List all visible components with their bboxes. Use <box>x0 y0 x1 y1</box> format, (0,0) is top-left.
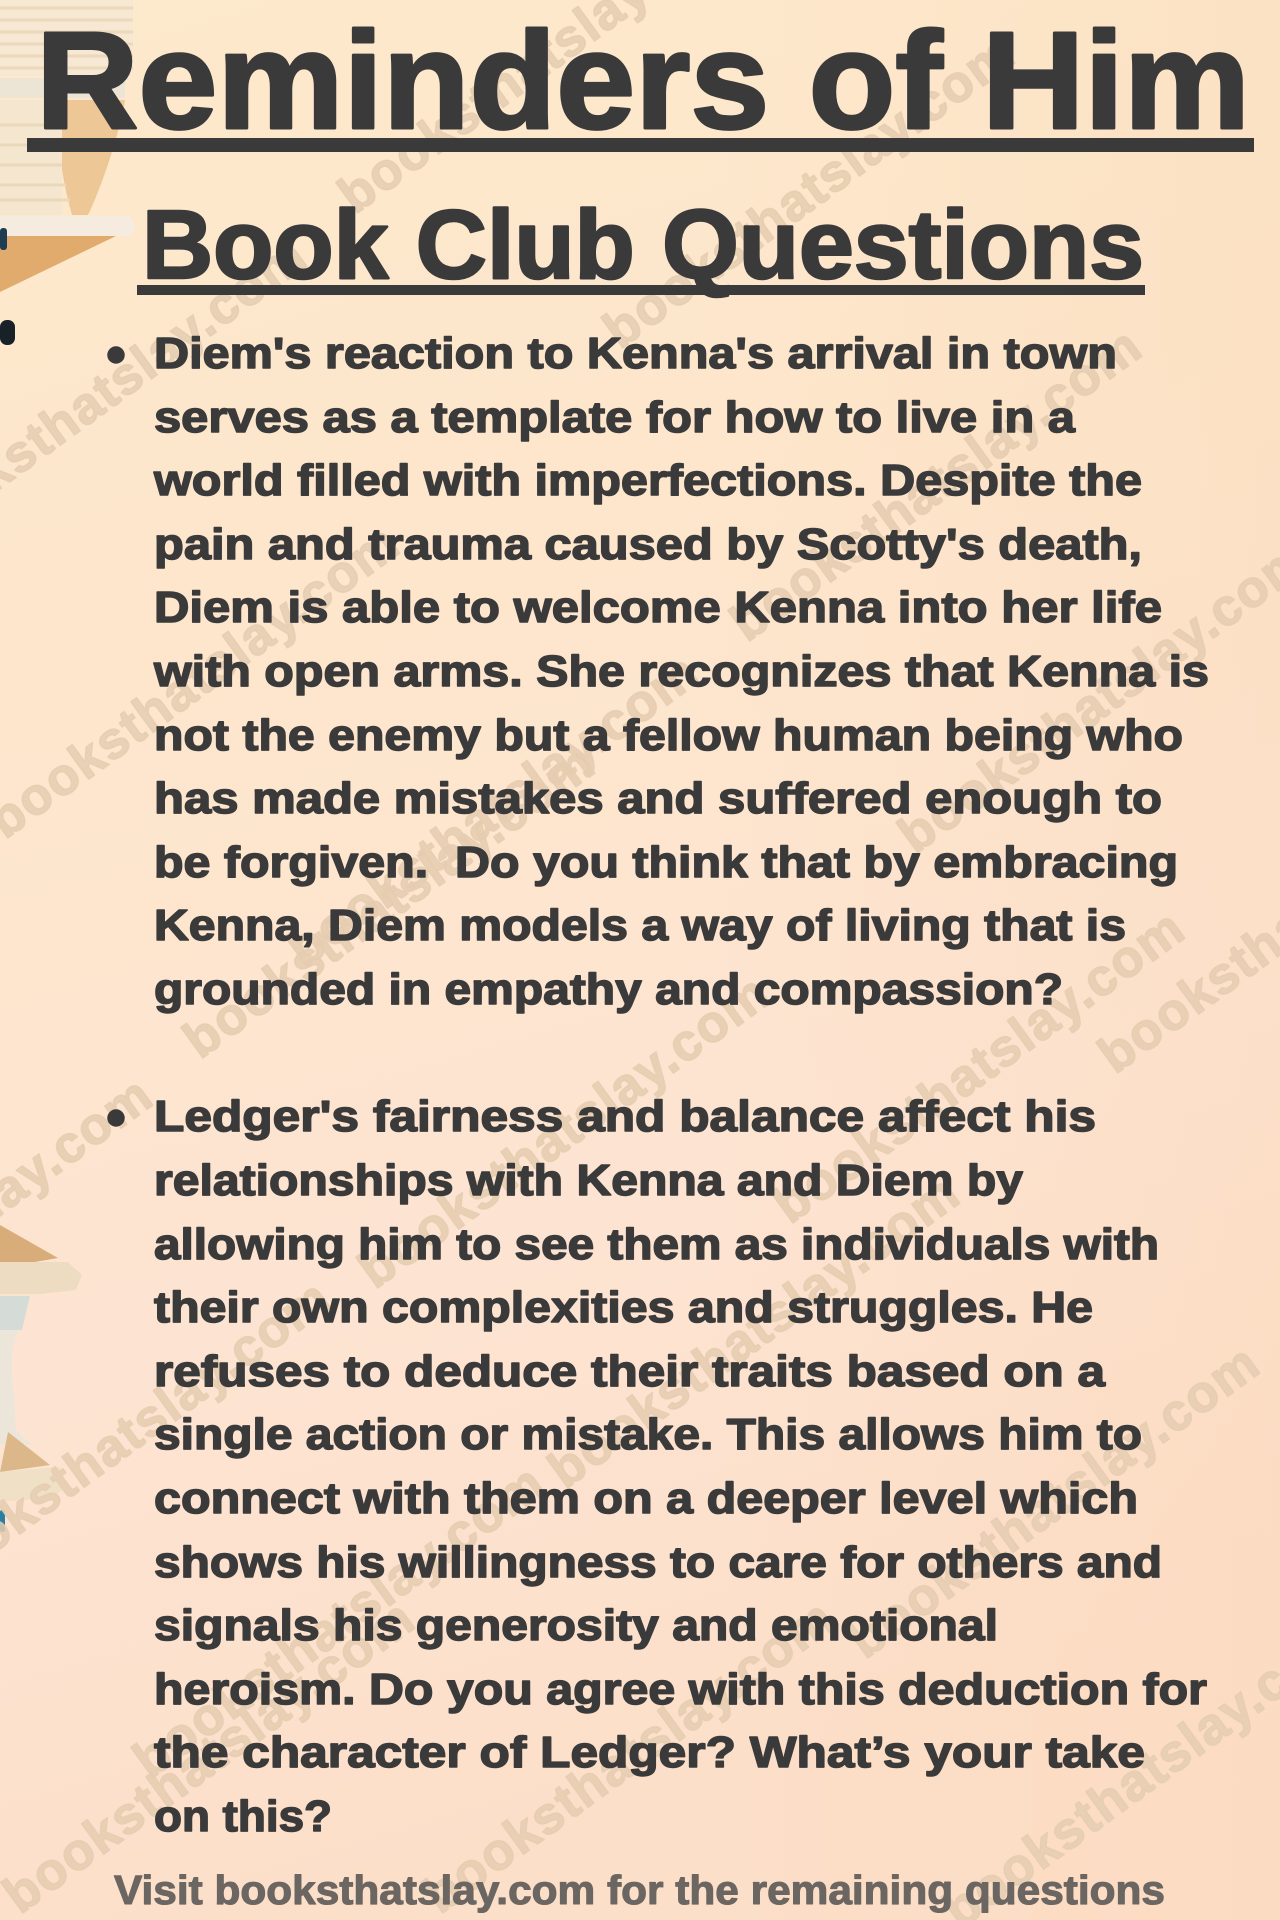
question 2: relationships with Kenna and Diem by <box>154 1156 1024 1205</box>
question 2: Ledger's fairness and balance affect his <box>154 1092 1096 1141</box>
question 1: Diem is able to welcome Kenna into her life <box>154 583 1162 632</box>
question 1: has made mistakes and suffered enough to <box>154 774 1162 823</box>
question 1: world filled with imperfections. Despite the <box>153 456 1142 505</box>
shelf decoration: middle left <box>0 1225 82 1532</box>
footer call to action: Visit booksthatslay.com for the remaining questions <box>114 1867 1165 1913</box>
question 2 <box>108 1092 1207 1841</box>
question 2: signals his generosity and emotional <box>154 1601 998 1650</box>
title: Reminders of Him <box>36 4 1250 158</box>
question 2: refuses to deduce their traits based on a <box>154 1347 1106 1396</box>
question 1 <box>108 329 1209 1014</box>
question 2: connect with them on a deeper level which <box>154 1474 1138 1523</box>
question 2: shows his willingness to care for others and <box>154 1538 1162 1587</box>
watermarks: booksthatslay.com <box>123 1453 556 1790</box>
question 1: not the enemy but a fellow human being who <box>154 711 1183 760</box>
shelf decoration: top left <box>0 0 136 345</box>
watermarks: booksthatslay.com <box>538 1163 971 1500</box>
question 1: grounded in empathy and compassion? <box>154 965 1063 1014</box>
question 1: with open arms. She recognizes that Kenna is <box>153 647 1209 696</box>
question 1: Kenna, Diem models a way of living that is <box>154 901 1126 950</box>
question 2: on this? <box>154 1792 332 1841</box>
question 2: the character of Ledger? What’s your take <box>154 1728 1145 1777</box>
watermarks: booksthatslay.com <box>348 963 781 1300</box>
watermarks: booksthatslay.com <box>763 898 1196 1235</box>
question 2: their own complexities and struggles. He <box>154 1283 1093 1332</box>
watermarks: booksthatslay.com <box>838 1333 1271 1670</box>
question 2: allowing him to see them as individuals with <box>154 1220 1159 1269</box>
watermarks: booksthatslay.com <box>720 316 1153 653</box>
question 2: single action or mistake. This allows him to <box>154 1410 1142 1459</box>
subtitle: Book Club Questions <box>142 190 1144 299</box>
bullet 2 <box>108 1110 124 1126</box>
watermarks: booksthatslay.com <box>173 733 606 1070</box>
question 1: serves as a template for how to live in a <box>154 393 1076 442</box>
question 2: heroism. Do you agree with this deduction for <box>154 1665 1207 1714</box>
question 1: be forgiven. Do you think that by embracing <box>154 838 1178 887</box>
watermarks: booksthatslay.com <box>277 642 710 979</box>
question 1: pain and trauma caused by Scotty's death, <box>154 520 1142 569</box>
bullet 1 <box>108 347 124 363</box>
watermarks: booksthatslay.com <box>593 23 1026 360</box>
watermarks: booksthatslay.com <box>413 1588 846 1920</box>
question 1: Diem's reaction to Kenna's arrival in town <box>154 329 1117 378</box>
